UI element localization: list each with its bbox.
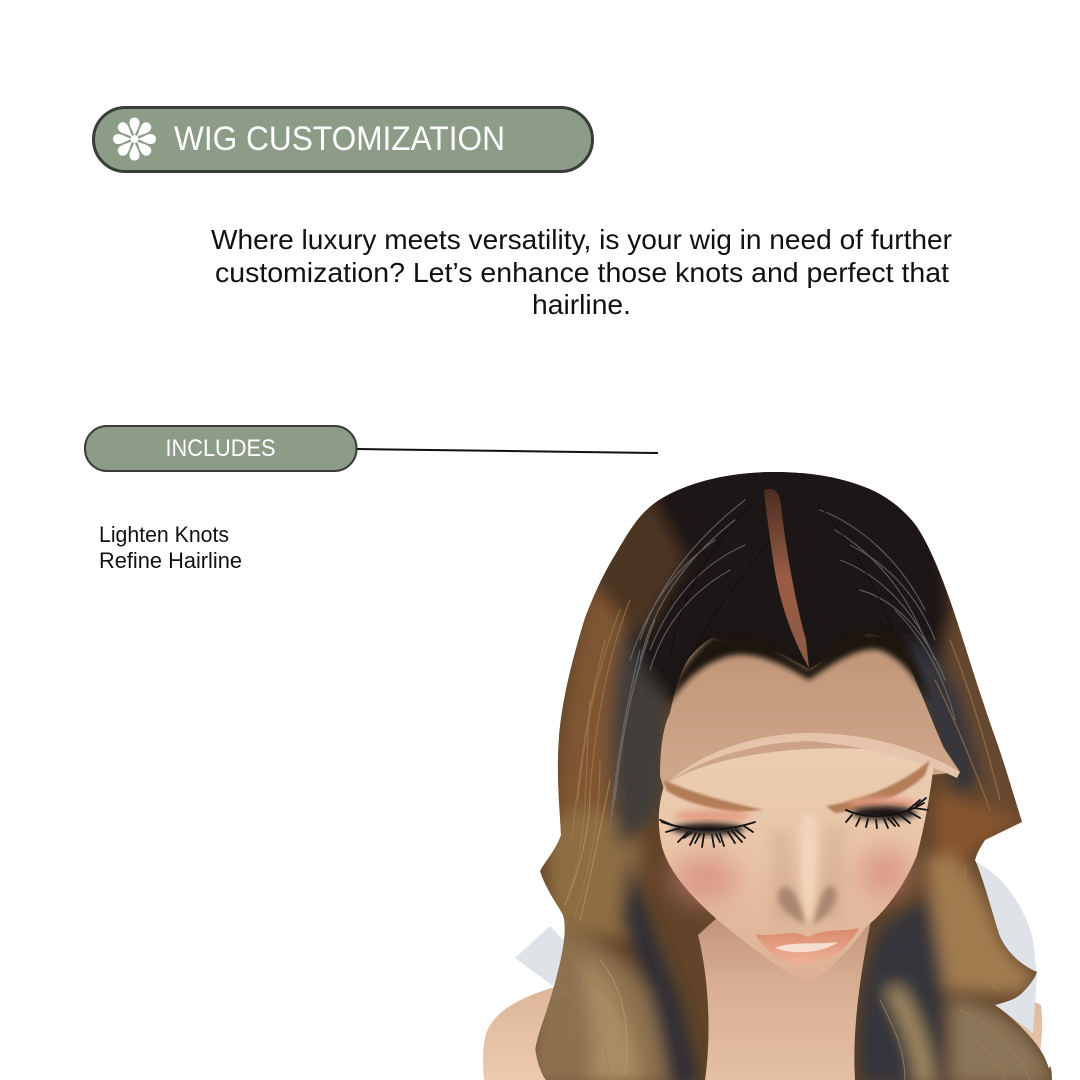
lips <box>755 928 859 964</box>
nose shadow <box>778 886 836 925</box>
right lashes <box>846 798 928 828</box>
nose bridge highlight <box>800 815 817 925</box>
neck <box>698 915 872 1080</box>
hair colour zones <box>530 440 1055 1080</box>
intro paragraph <box>211 224 952 320</box>
gray and dark hair strands <box>610 500 955 830</box>
white top straps <box>515 860 1037 1033</box>
includes list: Lighten Knots <box>99 522 229 547</box>
center hair part <box>764 489 809 668</box>
hair <box>520 440 1060 1080</box>
hair base colour <box>520 460 1060 1080</box>
connector line from pill to wig <box>357 449 658 453</box>
intro paragraph: Where luxury meets versatility, is your wig in need of further <box>211 224 952 255</box>
includes pill: INCLUDES <box>166 435 276 462</box>
mannequin wearing wig illustration <box>483 440 1060 1080</box>
forehead and face <box>659 748 934 982</box>
lace front cap <box>660 634 960 790</box>
includes pill <box>85 426 356 471</box>
includes list <box>99 522 242 573</box>
nose bridge shading <box>770 825 845 925</box>
title pill: wig customization <box>94 108 592 172</box>
intro paragraph: customization? Let’s enhance those knots and perfect that <box>215 257 949 288</box>
includes list: Refine Hairline <box>99 548 242 573</box>
title text: WIG CUSTOMIZATION <box>174 120 505 158</box>
shoulders <box>483 960 1042 1080</box>
icon: white daisy flower <box>113 118 156 160</box>
cheek blush <box>673 848 911 902</box>
hairline shadow <box>668 632 930 705</box>
eye shadow <box>674 797 916 822</box>
intro paragraph: hairline. <box>532 289 631 320</box>
eyebrows <box>664 760 930 813</box>
lace band edge <box>662 733 960 788</box>
left lashes <box>660 820 755 847</box>
